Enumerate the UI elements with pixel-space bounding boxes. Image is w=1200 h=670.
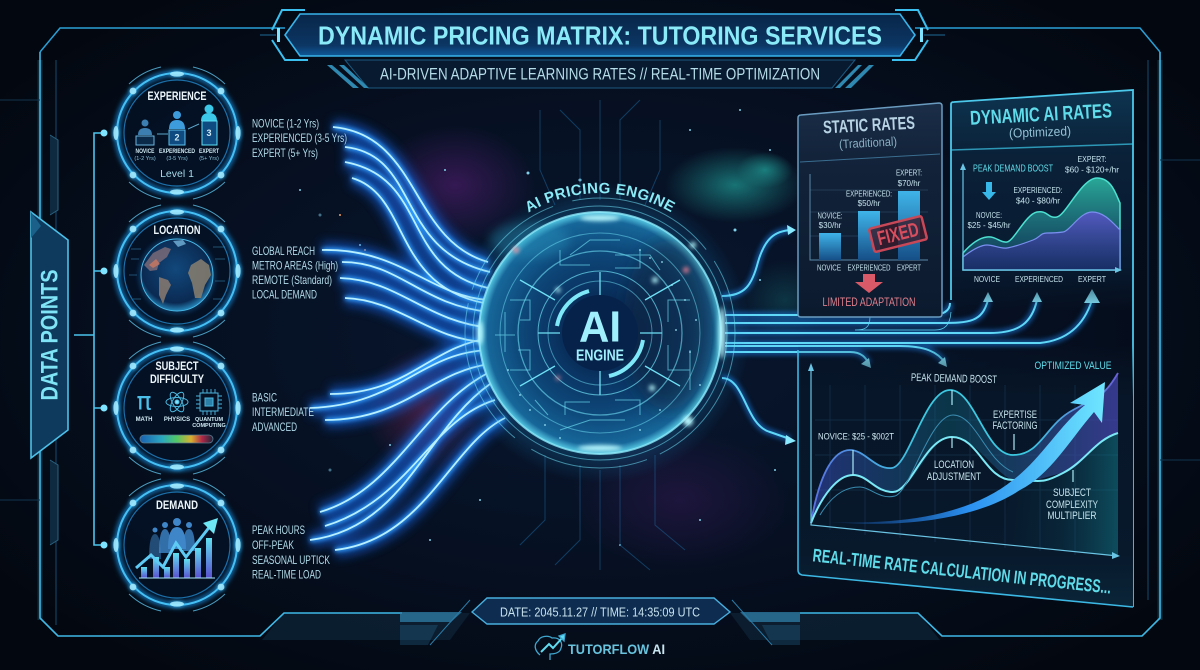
heading: static rates: STATIC RATES — [823, 113, 915, 137]
list: subject levels: BASIC — [252, 390, 277, 404]
list: subject levels: INTERMEDIATE — [252, 405, 314, 419]
icon labels: QUANTUM — [195, 417, 223, 423]
difficulty scale — [140, 435, 213, 443]
list: demand signals — [252, 523, 330, 582]
heading: AI pricing engine: AI PRICING ENGINE — [527, 182, 676, 212]
icon labels — [136, 417, 226, 429]
heading: demand: DEMAND — [156, 498, 198, 512]
list: demand signals: REAL-TIME LOAD — [252, 568, 321, 582]
list: experience tiers — [252, 116, 347, 160]
chart annotations: ADJUSTMENT — [927, 471, 981, 483]
panel: experience — [113, 67, 241, 199]
subheading: traditional: (Traditional) — [839, 134, 897, 152]
bar chart: static rates: NOVICE — [817, 264, 841, 272]
chart annotations: PEAK DEMAND BOOST — [911, 372, 997, 386]
panel: subject difficulty — [113, 342, 241, 474]
panel: real-time rate calculation — [798, 345, 1133, 607]
bar chart: static rates: NOVICE: — [818, 212, 842, 220]
title banner — [260, 10, 945, 60]
panel: demand — [113, 479, 241, 611]
orb sublabel: ENGINE — [576, 348, 624, 364]
area chart: dynamic rates: NOVICE: — [976, 211, 1002, 220]
icon: experience levels — [134, 104, 219, 162]
orb highlights — [477, 215, 725, 451]
icon: experience levels: EXPERT — [199, 149, 219, 155]
decoration bars: bottom — [400, 612, 800, 645]
icon: atom — [166, 390, 188, 414]
icon: demand chart — [136, 518, 218, 578]
icon labels: MATH — [136, 417, 152, 423]
panel: dynamic AI rates — [951, 90, 1133, 607]
panel: location — [113, 205, 241, 337]
bar chart: static rates: EXPERIENCED: — [846, 190, 892, 198]
orb rings — [465, 198, 735, 468]
list: location factors — [252, 244, 338, 302]
icon labels: PHYSICS — [164, 417, 190, 423]
caption: limited adaptation: LIMITED ADAPTATION — [822, 295, 916, 309]
stamp: fixed: FIXED — [875, 219, 921, 250]
icon labels: COMPUTING — [192, 423, 226, 429]
bar chart: static rates — [810, 168, 928, 272]
list: demand signals: PEAK HOURS — [252, 523, 305, 537]
logo: TutorFlow AI — [535, 634, 665, 660]
area chart: dynamic rates: NOVICE — [974, 275, 1000, 284]
heading: subject difficulty — [150, 359, 204, 386]
heading: dynamic AI rates: DYNAMIC AI RATES — [970, 100, 1112, 130]
subtitle text: AI-DRIVEN ADAPTIVE LEARNING RATES // REAL-TIME OPTIMIZATION — [380, 66, 820, 84]
list: experience tiers: EXPERIENCED (3-5 Yrs) — [252, 131, 347, 145]
panel: static rates — [798, 103, 942, 317]
heading: experience: EXPERIENCE — [148, 89, 206, 103]
area chart: dynamic rates: $25 - $45/hr — [968, 221, 1011, 230]
chart annotations: EXPERTISE — [993, 409, 1037, 421]
list: demand signals: OFF-PEAK — [252, 538, 294, 552]
streams: input data flows — [310, 127, 505, 550]
heading: location: LOCATION — [154, 223, 200, 237]
heading: subject difficulty: SUBJECT — [156, 359, 199, 373]
list: location factors: LOCAL DEMAND — [252, 288, 317, 302]
caption: level: Level 1 — [160, 168, 194, 180]
icon: experience levels: 2 — [174, 132, 180, 142]
chart annotations: LOCATION — [934, 459, 974, 471]
heading: subject difficulty: DIFFICULTY — [150, 372, 204, 386]
bar chart: static rates: $70/hr — [898, 179, 921, 188]
banner: data points — [31, 212, 68, 458]
arrow: down — [855, 274, 883, 293]
icon: brain with arrow — [535, 634, 565, 660]
bar chart: static rates: $50/hr — [858, 199, 881, 208]
chart annotations — [818, 360, 1112, 522]
chart annotations: FACTORING — [992, 420, 1038, 432]
area chart: dynamic rates: EXPERT: — [1078, 155, 1106, 164]
orb speckles — [507, 249, 701, 439]
list: location factors: METRO AREAS (High) — [252, 258, 338, 272]
chart annotations: MULTIPLIER — [1048, 510, 1097, 522]
chart annotations: OPTIMIZED VALUE — [1034, 360, 1112, 372]
area chart: dynamic rates: EXPERT — [1078, 275, 1106, 284]
icon: experience levels: EXPERIENCED — [159, 149, 196, 155]
subtitle banner — [327, 60, 874, 88]
bar chart: static rates: EXPERIENCED — [848, 264, 891, 272]
date and time panel — [430, 598, 772, 645]
icon: experience levels: (1-2 Yrs) — [134, 156, 156, 162]
bar chart: static rates: EXPERT: — [896, 168, 922, 178]
list: experience tiers: EXPERT (5+ Yrs) — [252, 146, 318, 160]
area chart: dynamic rates: EXPERIENCED: — [1014, 186, 1062, 195]
icon: experience levels: NOVICE — [136, 149, 154, 155]
chart: rate curves — [808, 363, 1120, 559]
area chart: dynamic rates: $40 - $80/hr — [1016, 196, 1060, 206]
chart annotations: COMPLEXITY — [1046, 499, 1098, 511]
icon: experience levels: (5+ Yrs) — [199, 156, 219, 162]
core: AI engine orb — [450, 183, 750, 483]
area chart: dynamic rates: EXPERIENCED — [1015, 275, 1063, 284]
logo text: TUTORFLOW AI — [568, 641, 665, 657]
chart annotations: NOVICE: $25 - $002T — [818, 432, 894, 442]
list: subject levels: ADVANCED — [252, 420, 297, 434]
chart annotations: SUBJECT — [1053, 487, 1091, 499]
list: location factors: GLOBAL REACH — [252, 244, 315, 258]
icon: experience levels: (3-5 Yrs) — [166, 156, 188, 162]
connector: data points tree — [74, 130, 108, 548]
list: location factors: REMOTE (Standard) — [252, 273, 332, 287]
streams: output flows — [722, 225, 1100, 445]
list: demand signals: SEASONAL UPTICK — [252, 553, 330, 567]
area chart: dynamic rates: $60 - $120+/hr — [1065, 166, 1119, 174]
icon: pi: π — [136, 386, 152, 416]
orb label: AI — [579, 302, 621, 352]
icon: experience levels: 3 — [206, 128, 212, 138]
list: subject levels — [252, 390, 314, 434]
list: experience tiers: NOVICE (1-2 Yrs) — [252, 116, 319, 130]
area chart: dynamic rates: PEAK DEMAND BOOST — [973, 164, 1053, 174]
icon: globe — [129, 236, 225, 314]
banner label: DATA POINTS — [36, 270, 64, 400]
title text: DYNAMIC PRICING MATRIX: TUTORING SERVICES — [318, 20, 882, 50]
date text: DATE: 2045.11.27 // TIME: 14:35:09 UTC — [500, 604, 700, 620]
subheading: optimized: (Optimized) — [1009, 123, 1071, 141]
bar chart: static rates: EXPERT — [897, 264, 921, 272]
bar chart: static rates: $30/hr — [819, 221, 842, 230]
area chart: dynamic rates — [960, 155, 1122, 284]
icon: chip — [196, 389, 222, 415]
